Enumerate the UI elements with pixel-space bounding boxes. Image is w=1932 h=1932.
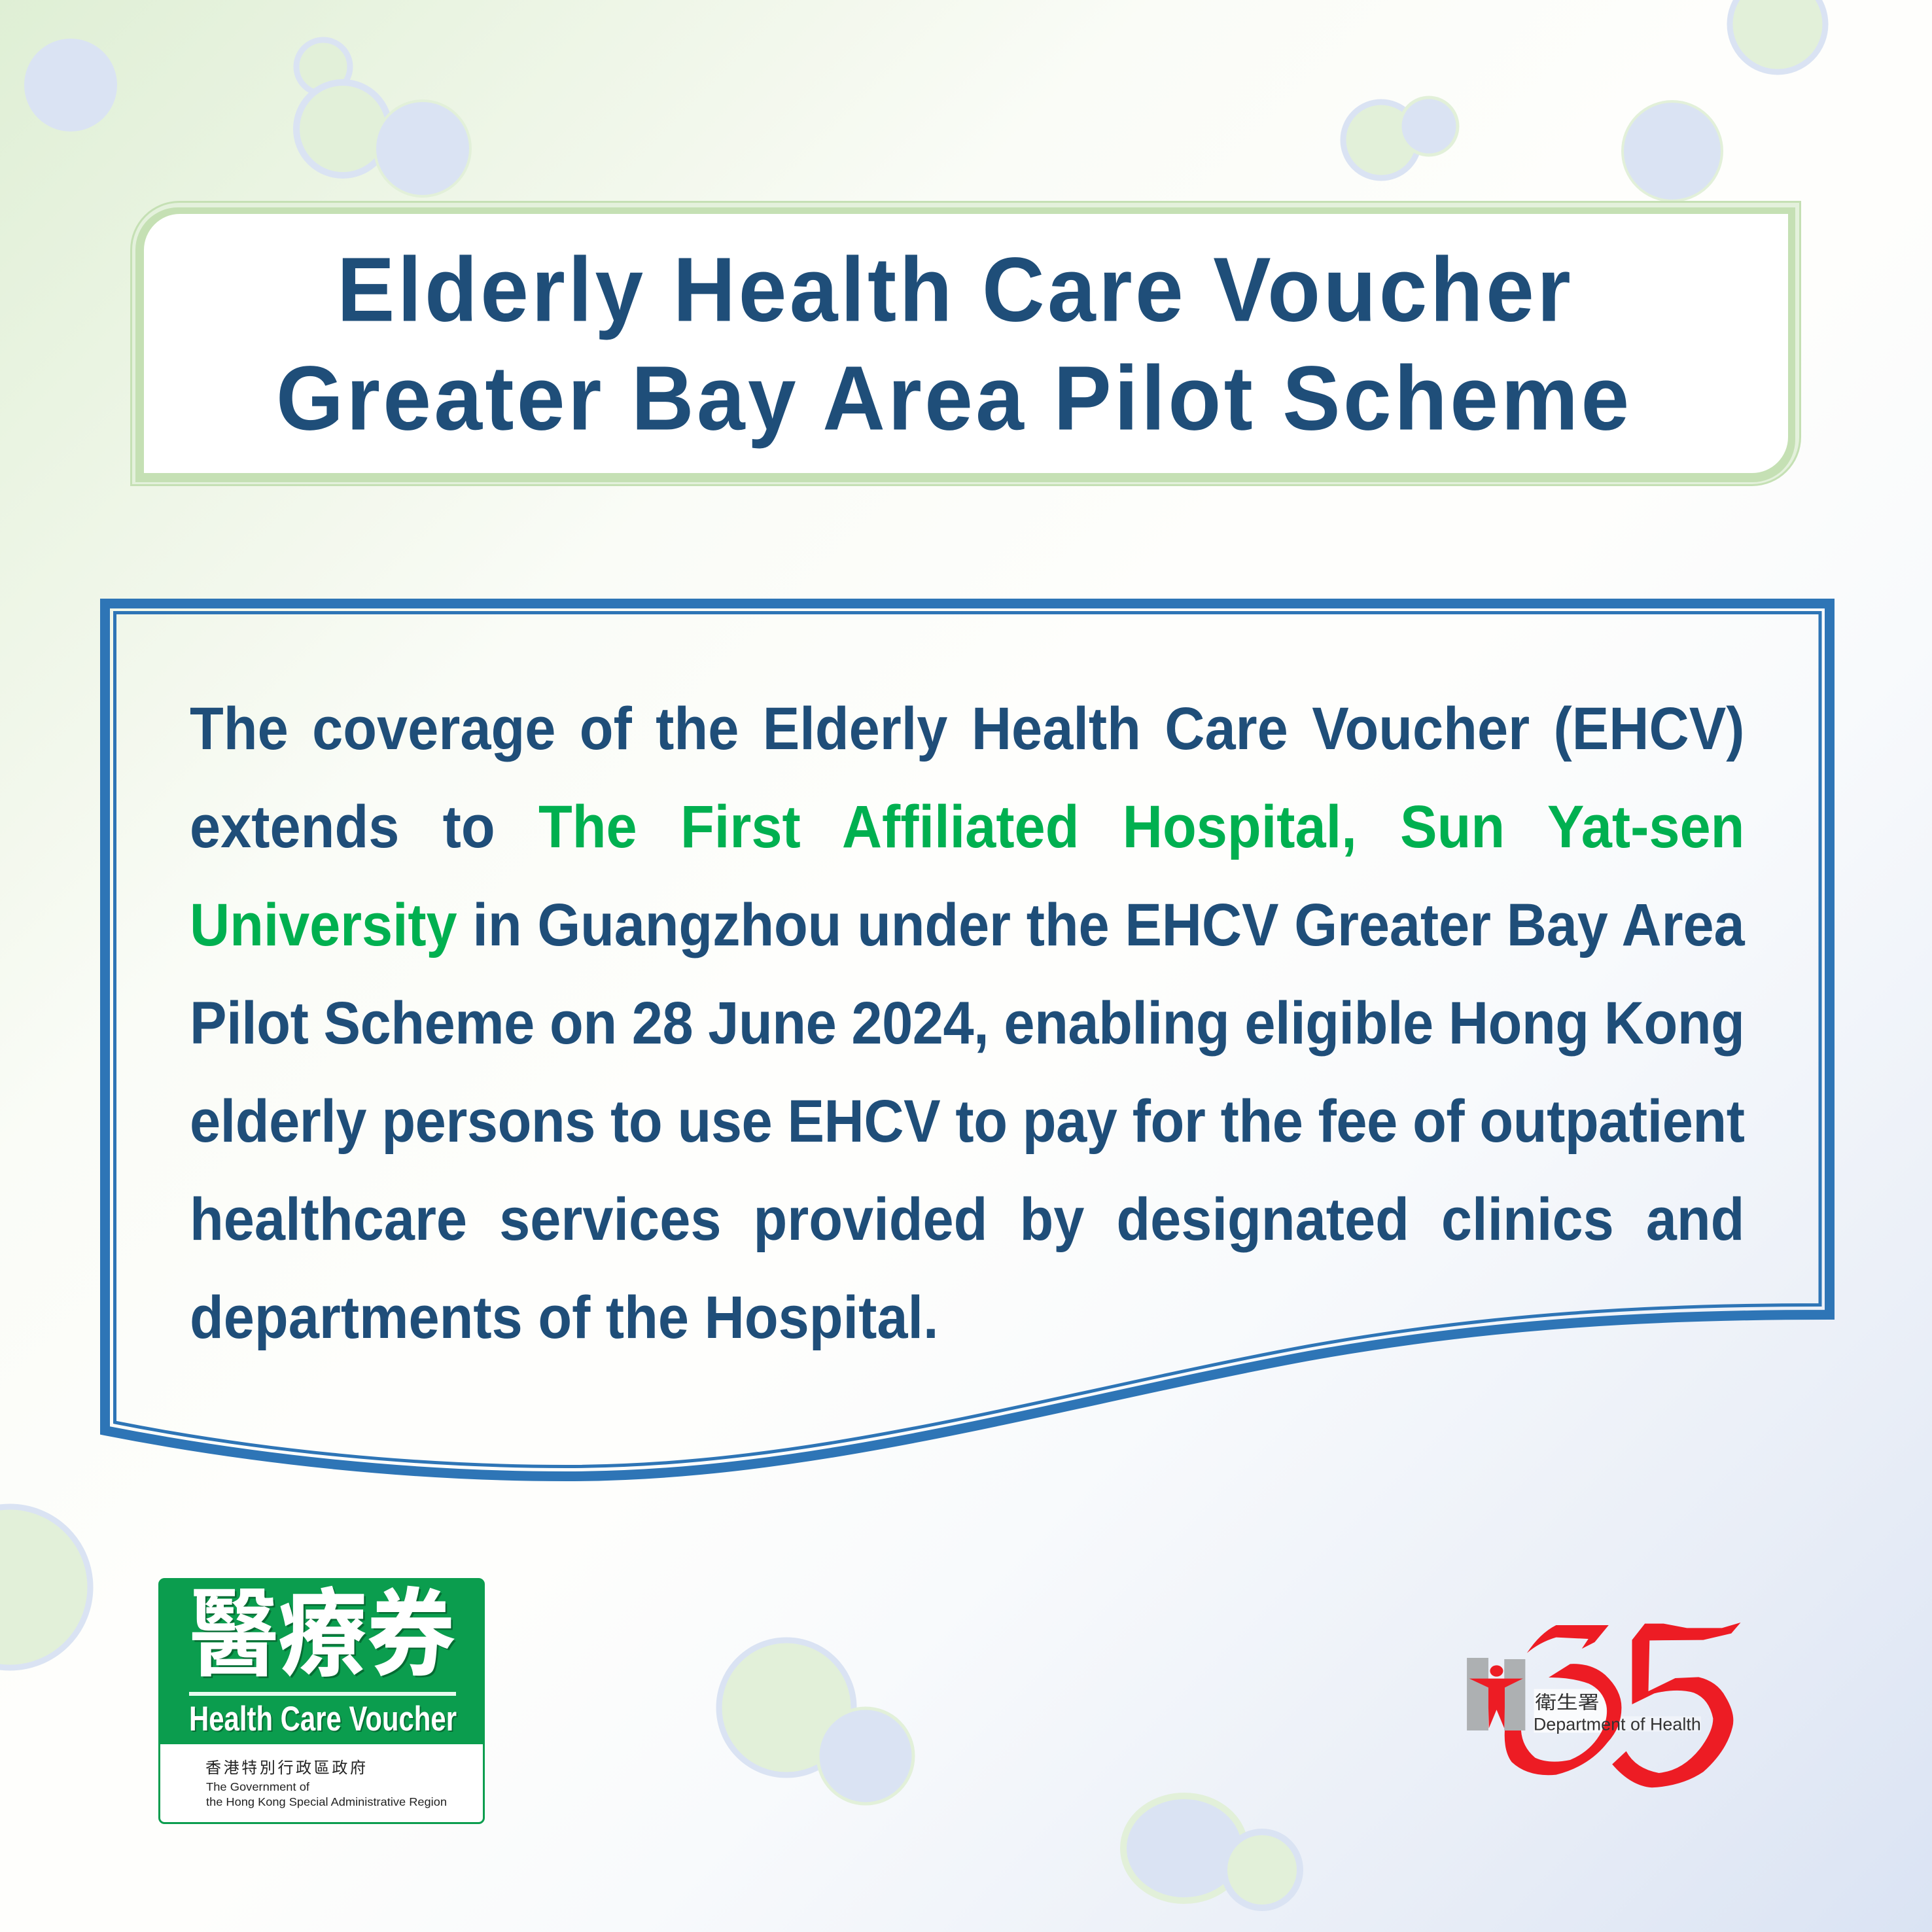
body panel double border [105, 603, 1829, 1476]
logo: Health Care Voucher: 醫療券 [192, 1583, 457, 1690]
body text: University in Guangzhou under the EHCV Greater Bay Area [190, 892, 1744, 958]
logo: Health Care Voucher [159, 1579, 484, 1823]
logo: Health Care Voucher: Health Care Voucher [190, 1701, 458, 1740]
logo: Health Care Voucher: 醫療券 [190, 1581, 455, 1688]
body text: The coverage of the Elderly Health Care Voucher (EHCV) [190, 695, 1744, 762]
title [276, 238, 1629, 449]
logo: Health Care Voucher: Health Care Voucher [189, 1700, 457, 1738]
logo: Department of Health 135: Department of Health [1534, 1714, 1701, 1734]
logo: Health Care Voucher: The Government of [206, 1780, 309, 1793]
logo: Health Care Voucher: 香港特別行政區政府 [205, 1759, 366, 1777]
body text [190, 695, 1746, 1351]
body text: healthcare services provided by designated clinics and [190, 1186, 1744, 1253]
body text: departments of the Hospital. [190, 1284, 939, 1351]
body text: extends to The First Affiliated Hospital, Sun Yat-sen [190, 794, 1744, 860]
body text: Pilot Scheme on 28 June 2024, enabling eligible Hong Kong [190, 990, 1744, 1057]
decorative bubbles: bottom [0, 1507, 1300, 1908]
decorative bubbles: top right [1343, 0, 1825, 201]
title: Greater Bay Area Pilot Scheme [276, 347, 1629, 449]
body text: elderly persons to use EHCV to pay for the fee of outpatient [190, 1088, 1744, 1155]
title: Elderly Health Care Voucher [337, 238, 1571, 340]
title panel frame [130, 201, 1801, 486]
logo: Department of Health 135 [1467, 1623, 1741, 1787]
decorative bubbles: top left [24, 39, 470, 196]
logo: Health Care Voucher: the Hong Kong Special Administrative Region [206, 1795, 447, 1808]
logo: Department of Health 135: 衛生署 [1535, 1692, 1600, 1713]
